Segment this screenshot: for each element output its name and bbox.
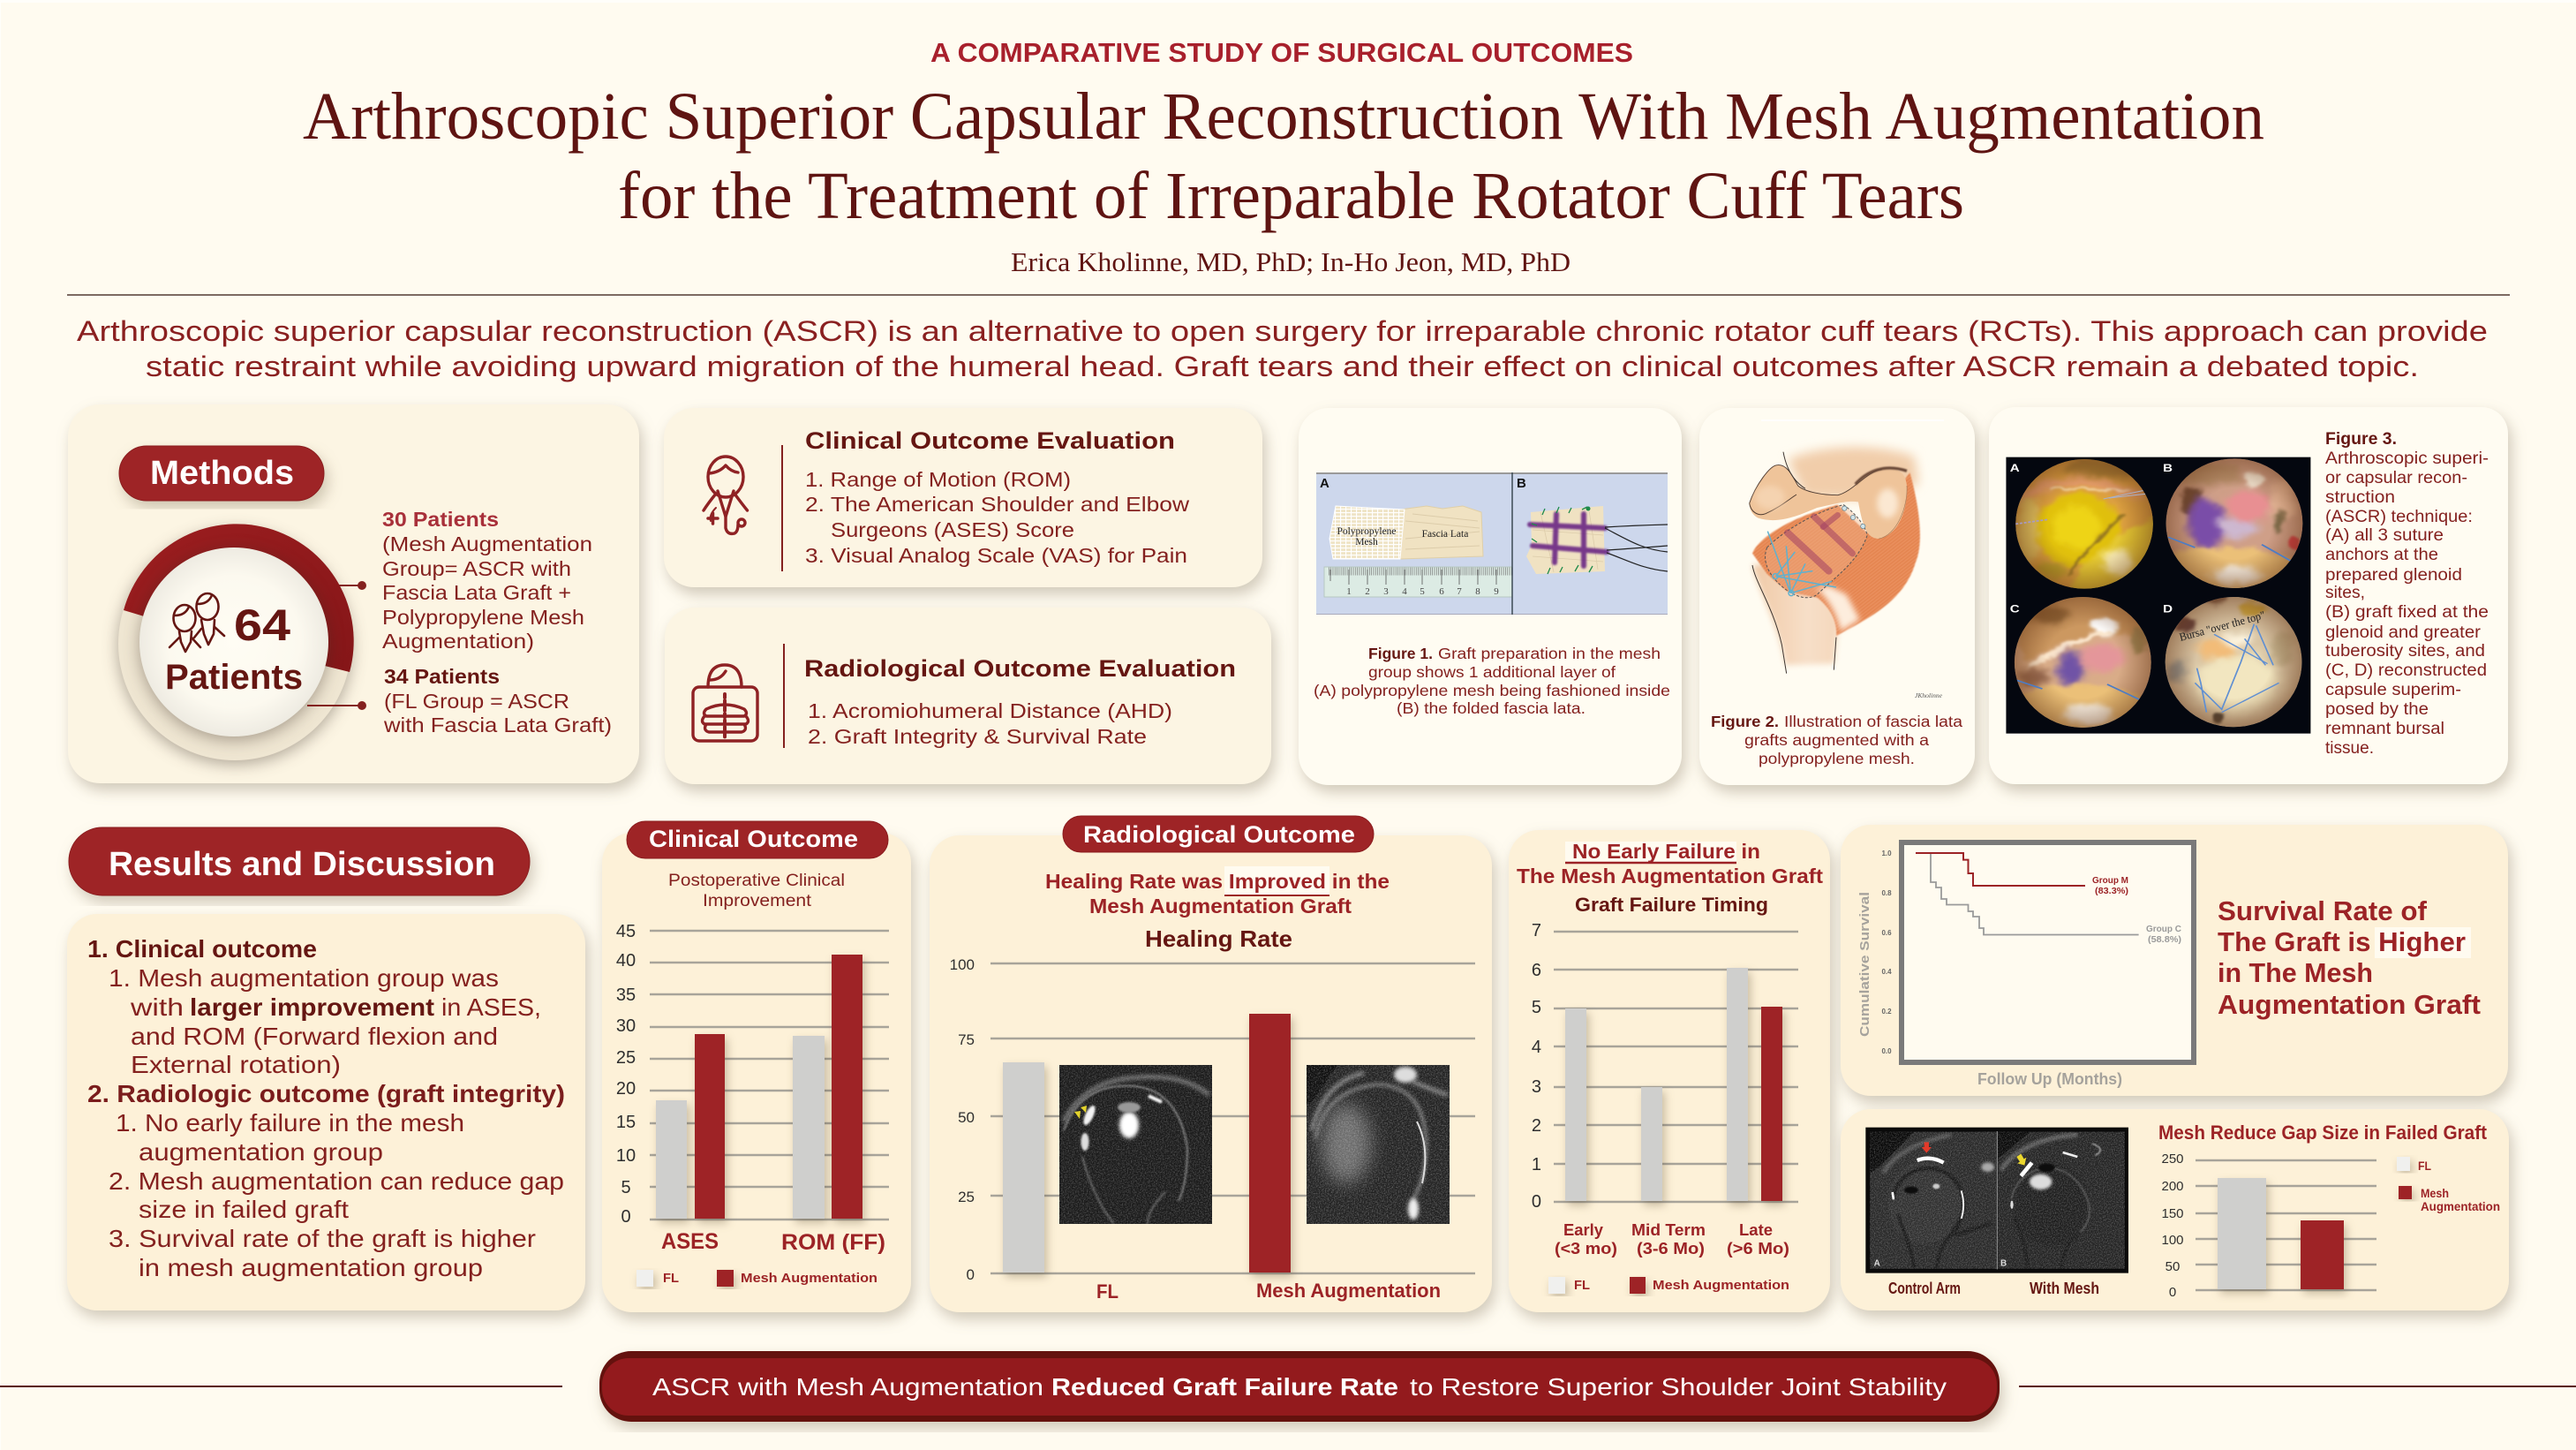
- line chart: Kaplan-Meier survival: Follow Up (Months): [1977, 1070, 2122, 1088]
- figure 2 caption: Figure 2.: [1711, 713, 1779, 730]
- figure 2 caption: Illustration of fascia lata: [1784, 713, 1962, 730]
- figure 1 caption: (A) polypropylene mesh being fashioned inside: [1314, 682, 1670, 699]
- panel: figure 2: [1699, 408, 1975, 785]
- highlighted finding: The Mesh Augmentation Graft: [1517, 865, 1823, 887]
- bar chart: failure timing: 2: [1532, 1116, 1541, 1136]
- bar chart: failure timing: (<3 mo): [1555, 1239, 1617, 1257]
- radiologic outcome findings: augmentation group: [139, 1138, 383, 1166]
- figure 3 caption: sites,: [2325, 584, 2365, 602]
- panel: radiological outcome evaluation: [665, 608, 1271, 784]
- clinical outcome pill: [627, 821, 888, 858]
- figure 1 caption: (B) the folded fascia lata.: [1397, 699, 1586, 717]
- figure 1 image: graft preparation: 5: [1420, 586, 1425, 597]
- legend: [2397, 1157, 2500, 1213]
- figure 3 image: arthroscopic views: [2004, 450, 2310, 734]
- view letters: D: [2163, 603, 2173, 615]
- figure 3 caption: Arthroscopic superi-: [2325, 449, 2489, 468]
- bar chart: clinical improvement: 25: [616, 1048, 636, 1068]
- bar chart: clinical improvement: 5: [621, 1178, 631, 1197]
- figure 3 caption: posed by the: [2325, 700, 2429, 719]
- text: 30 patients mesh group: Augmentation): [382, 630, 534, 653]
- conclusion banner: ASCR with Mesh Augmentation: [652, 1373, 1043, 1401]
- line chart: Kaplan-Meier survival: Cumulative Survival: [1857, 892, 1872, 1037]
- figure 2 illustration: shoulder with mesh graft: [1750, 447, 1920, 674]
- text: 30 patients mesh group: [382, 508, 592, 653]
- donut chart: 64 patients: Patients: [165, 658, 303, 697]
- results and discussion heading: Results and Discussion: [109, 846, 495, 883]
- line chart: Kaplan-Meier survival: (58.8%): [2148, 934, 2181, 945]
- figure 1 image: graft preparation: 1: [1346, 586, 1352, 597]
- introduction text: [77, 315, 2488, 382]
- label on view D: Bursa "over the top": [2178, 608, 2266, 644]
- conclusion banner: to Restore Superior Shoulder Joint Stability: [1410, 1373, 1947, 1401]
- figure 1 caption: Figure 1.: [1368, 645, 1433, 662]
- figure 1 image: graft preparation: 2: [1365, 586, 1370, 597]
- donut chart: 64 patients: [118, 524, 354, 760]
- panel: gap size: [1841, 1109, 2509, 1310]
- line chart: Kaplan-Meier survival: 0.8: [1881, 889, 1892, 897]
- view letters: [2010, 463, 2173, 615]
- title: for the Treatment of Irreparable Rotator Cuff Tears: [618, 159, 1964, 233]
- figure 2 caption: [1711, 713, 1962, 767]
- bar chart: gap size: 250: [2161, 1152, 2184, 1167]
- bar chart: failure timing: (>6 Mo): [1727, 1239, 1789, 1257]
- bar chart: failure timing: 4: [1532, 1038, 1541, 1057]
- MRI pair: control arm and with mesh: B: [2000, 1258, 2007, 1268]
- clinical outcome findings: External rotation): [131, 1051, 341, 1078]
- legend: FL: [1574, 1278, 1590, 1293]
- highlighted finding: Mesh Augmentation Graft: [1089, 895, 1352, 918]
- panel: radiological outcome healing rate: [930, 816, 1492, 1312]
- icon: chest x-ray: [693, 665, 757, 741]
- bar chart: failure timing: Mid Term: [1631, 1220, 1706, 1239]
- survival finding text: The Graft is Higher: [2218, 926, 2466, 957]
- title: [303, 79, 2264, 233]
- panel: graft failure timing: [1509, 830, 1830, 1312]
- bar chart: gap size: 150: [2161, 1206, 2184, 1221]
- bar chart: healing rate: [950, 956, 1475, 1303]
- legend: FL: [2418, 1159, 2431, 1173]
- clinical outcome findings: and ROM (Forward flexion and: [131, 1023, 498, 1050]
- figure 3 caption: prepared glenoid: [2325, 566, 2462, 585]
- MRI pair: control arm and with mesh: A: [1874, 1258, 1880, 1268]
- radiologic outcome findings: 2. Radiologic outcome (graft integrity): [87, 1080, 565, 1107]
- chart subtitle: [668, 872, 845, 910]
- line chart: Kaplan-Meier survival: 0.6: [1881, 929, 1892, 937]
- authors: Erica Kholinne, MD, PhD; In-Ho Jeon, MD, PhD: [1011, 246, 1570, 277]
- figure 1 image: graft preparation: 8: [1475, 586, 1480, 597]
- heading: Radiological Outcome Evaluation: [804, 655, 1236, 682]
- bar chart: clinical improvement: [616, 922, 889, 1255]
- title: Arthroscopic Superior Capsular Reconstruction With Mesh Augmentation: [303, 79, 2264, 154]
- chart subtitle: Improvement: [703, 892, 812, 910]
- text: 30 patients mesh group: Fascia Lata Graft +: [382, 581, 571, 604]
- figure 3 caption: capsule superim-: [2325, 681, 2461, 699]
- panel: results summary: [67, 914, 585, 1310]
- bar chart: healing rate: 50: [958, 1109, 975, 1126]
- arthroscopic view D: [2165, 597, 2302, 728]
- figure 1 image: graft preparation: 6: [1439, 586, 1444, 597]
- clinical outcome findings: 1. Mesh augmentation group was: [109, 964, 499, 992]
- bar chart: clinical improvement: 30: [616, 1016, 636, 1036]
- MRI captions: Control Arm: [1888, 1280, 1961, 1297]
- clinical outcome findings: in ASES,: [441, 993, 541, 1021]
- figure 3 caption: struction: [2325, 488, 2395, 507]
- panel: figure 1: [1299, 408, 1682, 785]
- bar chart: failure timing: 5: [1532, 998, 1541, 1017]
- figure 1 image: graft preparation: Mesh: [1355, 537, 1378, 548]
- legend: Mesh Augmentation: [1653, 1278, 1789, 1293]
- figure 1 image: graft preparation: 7: [1457, 586, 1462, 597]
- text: 34 patients FL group: (FL Group = ASCR: [384, 690, 569, 713]
- text: 30 patients mesh group: Polypropylene Mesh: [382, 606, 584, 629]
- view letters: C: [2010, 603, 2020, 615]
- connector: FL group: [307, 701, 366, 710]
- legend: Augmentation: [2421, 1199, 2500, 1213]
- bar chart: gap size: 0: [2169, 1285, 2176, 1300]
- survival finding text: in The Mesh: [2218, 957, 2373, 988]
- legend: Mesh: [2421, 1186, 2449, 1200]
- highlighted finding: [1517, 840, 1823, 887]
- bar chart: failure timing: Late: [1739, 1220, 1773, 1239]
- text: 34 patients FL group: with Fascia Lata Graft): [383, 714, 612, 736]
- line chart: Kaplan-Meier survival: Group C: [2146, 924, 2181, 934]
- list of clinical measures: 3. Visual Analog Scale (VAS) for Pain: [805, 544, 1187, 567]
- bar chart: gap size: 200: [2161, 1179, 2184, 1194]
- figure 3 caption: (B) graft fixed at the: [2325, 603, 2489, 622]
- chart subtitle: Postoperative Clinical: [668, 872, 845, 890]
- figure 1 image: graft preparation: Polypropylene: [1337, 526, 1397, 537]
- bar chart: failure timing: 1: [1532, 1155, 1541, 1174]
- figure 1 image: graft preparation: 3: [1383, 586, 1389, 597]
- line chart: Kaplan-Meier survival: 0.2: [1881, 1008, 1892, 1016]
- legend: [636, 1270, 877, 1287]
- bar chart: failure timing: 6: [1532, 961, 1541, 980]
- text: 34 patients FL group: [383, 665, 612, 736]
- figure 1 caption: group shows 1 additional layer of: [1368, 663, 1616, 681]
- bar chart: healing rate: 25: [958, 1189, 975, 1205]
- list of clinical measures: 2. The American Shoulder and Elbow: [805, 493, 1190, 516]
- bar chart: clinical improvement: 45: [616, 922, 636, 941]
- survival finding text: [2218, 895, 2481, 1020]
- survival finding text: Augmentation Graft: [2218, 989, 2481, 1020]
- radiologic outcome findings: 1. No early failure in the mesh: [116, 1109, 464, 1137]
- radiologic outcome findings: in mesh augmentation group: [139, 1254, 483, 1281]
- figure 3 caption: Figure 3.: [2325, 430, 2397, 449]
- conclusion banner: Reduced Graft Failure Rate: [1051, 1373, 1398, 1401]
- bar chart: healing rate: 75: [958, 1031, 975, 1048]
- icon: doctor with stethoscope: [704, 457, 747, 533]
- bar chart: healing rate: Mesh Augmentation: [1256, 1280, 1441, 1302]
- line chart: Kaplan-Meier survival: 0.4: [1881, 968, 1892, 976]
- legend: [1548, 1277, 1789, 1294]
- panel: clinical outcome evaluation: [664, 408, 1262, 587]
- illustrator signature: JKholinne: [1915, 691, 1943, 699]
- bar chart: clinical improvement: 35: [616, 986, 636, 1005]
- bar chart: healing rate: 0: [967, 1266, 975, 1283]
- radiologic outcome findings: [87, 1080, 565, 1281]
- bar chart: healing rate: 100: [950, 956, 975, 973]
- view letters: A: [2010, 463, 2020, 474]
- figure 1 caption: Graft preparation in the mesh: [1438, 645, 1661, 662]
- list of radiological measures: 1. Acromiohumeral Distance (AHD): [808, 699, 1172, 722]
- figure 3 caption: remnant bursal: [2325, 720, 2444, 738]
- figure 3 caption: or capsular recon-: [2325, 469, 2467, 487]
- figure 1 image: graft preparation: A: [1320, 476, 1329, 491]
- bar chart: failure timing: [1532, 921, 1798, 1257]
- MRI: FL group: [1059, 1065, 1212, 1224]
- MRI captions: With Mesh: [2030, 1280, 2099, 1297]
- introduction text: static restraint while avoiding upward migration of the humeral head. Graft tears and their effect on clinical outcomes after ASCR remain a debated topic.: [146, 351, 2419, 382]
- radiological outcome pill: [1063, 816, 1374, 852]
- bar chart: clinical improvement: 20: [616, 1079, 636, 1099]
- radiological outcome pill: Radiological Outcome: [1083, 821, 1355, 848]
- list of clinical measures: Surgeons (ASES) Score: [831, 518, 1074, 541]
- text: 34 patients FL group: 34 Patients: [384, 665, 500, 688]
- clinical outcome findings: 1. Clinical outcome: [87, 935, 317, 963]
- line chart: Kaplan-Meier survival: Group M: [2092, 875, 2128, 886]
- list of clinical measures: 1. Range of Motion (ROM): [805, 468, 1071, 491]
- line chart: Kaplan-Meier survival: 0.0: [1881, 1047, 1892, 1055]
- list of radiological measures: 2. Graft Integrity & Survival Rate: [808, 725, 1147, 748]
- figure 1 image: graft preparation: B: [1517, 476, 1526, 491]
- chart title: Healing Rate: [1145, 925, 1292, 952]
- panel: methods: [68, 404, 639, 783]
- figure 3 caption: (ASCR) technique:: [2325, 508, 2473, 526]
- figure 3 caption: glenoid and greater: [2325, 623, 2482, 642]
- MRI: mesh group: [1307, 1065, 1450, 1224]
- bar chart: clinical improvement: 40: [616, 951, 636, 970]
- radiologic outcome findings: 2. Mesh augmentation can reduce gap: [109, 1167, 564, 1195]
- highlighted finding: [1045, 866, 1390, 918]
- clinical outcome findings: larger improvement: [190, 993, 434, 1021]
- clinical outcome pill: Clinical Outcome: [649, 826, 858, 852]
- bar chart: healing rate: FL: [1096, 1280, 1119, 1303]
- figure 3 caption: (A) all 3 suture: [2325, 526, 2444, 545]
- bar chart: gap size: 100: [2161, 1233, 2184, 1248]
- figure 2 caption: grafts augmented with a: [1744, 731, 1929, 749]
- panel: clinical outcome chart: [602, 821, 911, 1312]
- list of radiological measures: [808, 699, 1172, 748]
- figure 3 caption: tissue.: [2325, 739, 2374, 758]
- list of clinical measures: [805, 468, 1190, 567]
- arthroscopic view C: [2015, 597, 2151, 728]
- MRI captions: [1888, 1280, 2099, 1297]
- bar chart: clinical improvement: ROM (FF): [781, 1230, 885, 1255]
- legend: Mesh Augmentation: [741, 1271, 877, 1286]
- figure 1 image: graft preparation: 4: [1402, 586, 1407, 597]
- radiologic outcome findings: 3. Survival rate of the graft is higher: [109, 1225, 536, 1252]
- panel: survival rate: [1841, 825, 2508, 1096]
- heading: Clinical Outcome Evaluation: [805, 427, 1175, 454]
- legend: FL: [663, 1271, 679, 1286]
- arthroscopic view A: [2015, 459, 2153, 589]
- bar chart: failure timing: Early: [1563, 1220, 1604, 1239]
- bar chart: clinical improvement: 0: [621, 1207, 631, 1227]
- line chart: Kaplan-Meier survival: (83.3%): [2095, 886, 2128, 896]
- bar chart: clinical improvement: ASES: [661, 1229, 719, 1254]
- figure 1 image: graft preparation: Fascia Lata: [1422, 529, 1468, 540]
- bar chart: failure timing: 7: [1532, 921, 1541, 940]
- figure 2 caption: polypropylene mesh.: [1759, 750, 1915, 767]
- figure 3 caption: (C, D) reconstructed: [2325, 661, 2487, 680]
- clinical outcome findings: [87, 935, 541, 1078]
- line chart: Kaplan-Meier survival: [1857, 842, 2194, 1088]
- bar chart: gap size: [2161, 1152, 2376, 1300]
- text: 30 patients mesh group: (Mesh Augmentation: [382, 532, 592, 555]
- results and discussion heading: [69, 827, 530, 895]
- figure 3 caption: tuberosity sites, and: [2325, 642, 2485, 661]
- highlighted finding: Healing Rate was Improved in the: [1045, 870, 1390, 893]
- methods heading pill: [119, 446, 324, 501]
- figure 1 image: graft preparation: 9: [1494, 586, 1499, 597]
- bar chart: clinical improvement: 10: [616, 1146, 636, 1166]
- icon: two patients: [169, 593, 224, 652]
- radiologic outcome findings: size in failed graft: [139, 1196, 349, 1223]
- arthroscopic view B: [2166, 458, 2302, 588]
- survival finding text: Survival Rate of: [2218, 895, 2428, 926]
- figure 1 caption: [1314, 645, 1670, 717]
- donut chart: 64 patients: 64: [234, 600, 290, 650]
- MRI pair: control arm and with mesh: [1865, 1128, 2128, 1273]
- figure 1 image: graft preparation: [1316, 472, 1668, 615]
- connector: mesh group: [339, 581, 366, 590]
- highlighted finding: No Early Failure in: [1572, 840, 1760, 863]
- chart heading: Mesh Reduce Gap Size in Failed Graft: [2158, 1121, 2488, 1144]
- line chart: Kaplan-Meier survival: 1.0: [1881, 850, 1892, 857]
- panel: figure 3: [1989, 407, 2508, 784]
- text: 30 patients mesh group: 30 Patients: [382, 508, 499, 531]
- methods heading pill: Methods: [150, 455, 294, 492]
- clinical outcome findings: with: [130, 993, 184, 1021]
- conclusion banner: [599, 1351, 2000, 1422]
- text: 30 patients mesh group: Group= ASCR with: [382, 557, 571, 580]
- bar chart: failure timing: 3: [1532, 1077, 1541, 1097]
- kicker: study type: A COMPARATIVE STUDY OF SURGICAL OUTCOMES: [930, 37, 1633, 68]
- bar chart: failure timing: (3-6 Mo): [1637, 1239, 1705, 1257]
- chart title: Graft Failure Timing: [1575, 894, 1768, 916]
- figure 3 caption: [2325, 430, 2489, 758]
- bar chart: failure timing: 0: [1532, 1192, 1541, 1212]
- bar chart: gap size: 50: [2165, 1259, 2180, 1274]
- view letters: B: [2163, 463, 2173, 474]
- introduction text: Arthroscopic superior capsular reconstruction (ASCR) is an alternative to open surgery for irreparable chronic rotator cuff tears (RCTs). This approach can provide: [77, 315, 2488, 347]
- figure 3 caption: anchors at the: [2325, 546, 2438, 564]
- bar chart: clinical improvement: 15: [616, 1113, 636, 1132]
